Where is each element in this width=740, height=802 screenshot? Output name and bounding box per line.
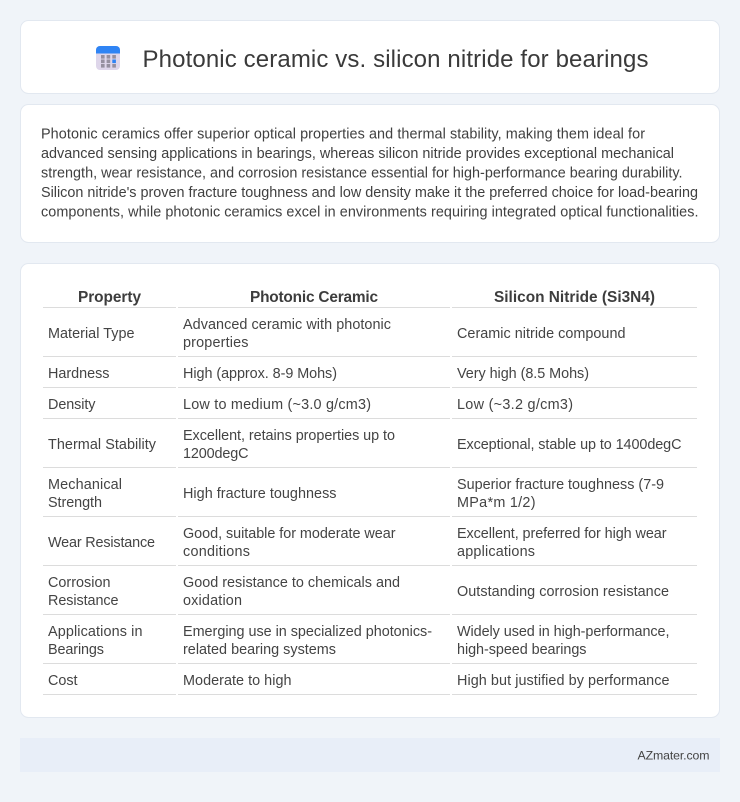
row: thermal stability [48,428,682,462]
row: wear resistance: Excellent, preferred for high wear [457,526,667,542]
footer credit: AZmater.com [638,748,710,762]
row: thermal stability: 1200degC [183,446,248,462]
row: wear resistance: conditions [183,544,250,560]
row: corrosion resistance: oxidation [183,593,242,609]
panel: description [20,104,720,242]
row: corrosion resistance [48,575,669,609]
row: applications in bearings: related bearing systems [183,642,336,658]
row: mechanical strength [48,477,664,511]
row: thermal stability: Thermal Stability [48,437,157,453]
row: corrosion resistance: Resistance [48,593,118,609]
footer [20,738,720,772]
row: density: Low to medium (~3.0 g/cm3) [183,397,371,413]
row: cost: Cost [48,673,78,689]
table header row: Property [78,289,141,306]
row: wear resistance [48,526,667,560]
text block: summary paragraph: components, while photonic ceramics excel in environments requiring integrated optical functionalities. [41,204,698,220]
row: mechanical strength: MPa*m 1/2) [457,495,536,511]
row: cost: High but justified by performance [457,673,670,689]
row: corrosion resistance: Corrosion [48,575,110,591]
row: hardness: Very high (8.5 Mohs) [457,366,589,382]
row: corrosion resistance: Good resistance to chemicals and [183,575,400,591]
title: Photonic ceramic vs. silicon nitride for bearings [142,46,648,73]
row: applications in bearings: Applications in [48,624,142,640]
row: thermal stability: Exceptional, stable up to 1400degC [457,437,682,453]
row: hardness: High (approx. 8-9 Mohs) [183,366,337,382]
row: material type: properties [183,335,248,351]
table header row: Silicon Nitride (Si3N4) [494,289,655,306]
table header row: Photonic Ceramic [250,289,378,306]
text block: summary paragraph [41,126,698,220]
text block: summary paragraph: Photonic ceramics offer superior optical properties and thermal stability, making them ideal for [41,126,645,142]
text block: summary paragraph: strength, wear resistance, and corrosion resistance essential for high-performance bearing durability. [41,166,682,182]
row: material type: Ceramic nitride compound [457,326,626,342]
row: cost: Moderate to high [183,673,292,689]
row: applications in bearings: Bearings [48,642,104,658]
text block: summary paragraph: advanced sensing applications in bearings, whereas silicon nitride provides exceptional mechanical [41,146,674,162]
row: mechanical strength: High fracture toughness [183,486,336,502]
table header row [78,289,655,306]
row: material type: Advanced ceramic with photonic [183,317,391,333]
row: applications in bearings [48,624,670,658]
row: density: Density [48,397,96,413]
text block: summary paragraph: Silicon nitride's proven fracture toughness and low density make it the preferred choice for load-bearing [41,185,698,201]
row: material type: Material Type [48,326,134,342]
row: mechanical strength: Strength [48,495,102,511]
row: density: Low (~3.2 g/cm3) [457,397,573,413]
row: material type [48,317,626,351]
row: wear resistance: Good, suitable for moderate wear [183,526,396,542]
icon: calendar [96,46,120,70]
row: applications in bearings: Widely used in high-performance, [457,624,670,640]
row: applications in bearings: Emerging use in specialized photonics- [183,624,432,640]
row: thermal stability: Excellent, retains properties up to [183,428,395,444]
row: mechanical strength: Superior fracture toughness (7-9 [457,477,664,493]
panel: comparison table [20,264,720,718]
row: mechanical strength: Mechanical [48,477,122,493]
panel: title card [20,20,720,94]
row: corrosion resistance: Outstanding corrosion resistance [457,584,669,600]
row: applications in bearings: high-speed bearings [457,642,586,658]
row: hardness [48,366,589,382]
row: cost [48,673,670,689]
row: wear resistance: Wear Resistance [48,535,155,551]
row: density [48,397,573,413]
row: wear resistance: applications [457,544,535,560]
row: hardness: Hardness [48,366,110,382]
